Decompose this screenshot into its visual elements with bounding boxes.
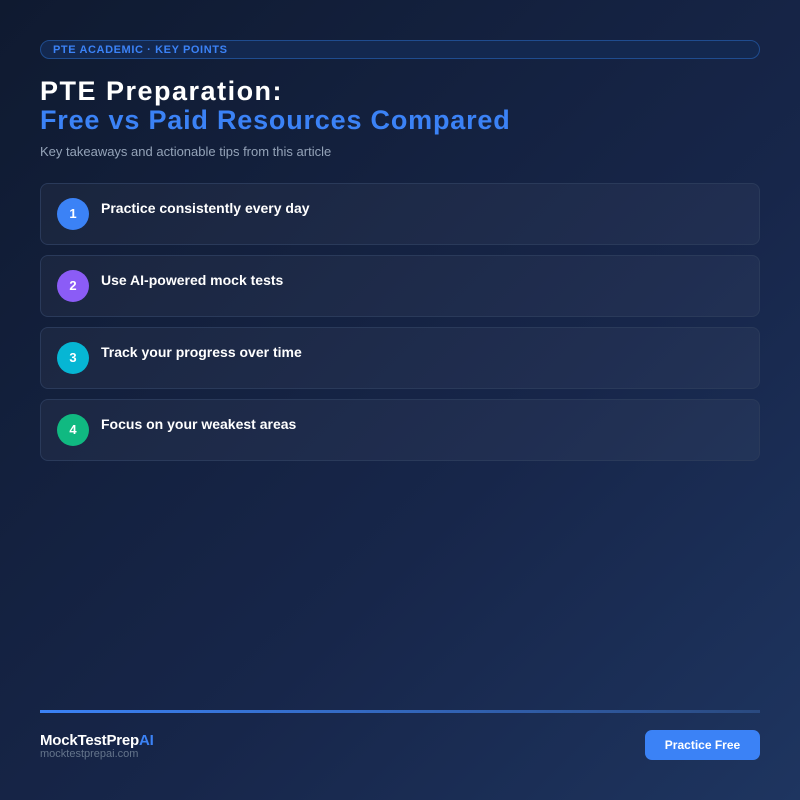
button: Practice Free (665, 738, 740, 752)
badge: PTE ACADEMIC · KEY POINTS (53, 44, 228, 56)
card 1: Practice consistently every day (101, 200, 310, 216)
button (645, 730, 760, 760)
card 2 (40, 255, 760, 317)
card 4 (40, 399, 760, 461)
subtitle: Key takeaways and actionable tips from this article (40, 144, 331, 159)
url: mocktestprepai.com (40, 748, 138, 760)
card 1: 1 (69, 206, 77, 221)
title line 2: Free vs Paid Resources Compared (40, 105, 510, 135)
card 1 (40, 183, 760, 245)
card 3 (40, 327, 760, 389)
card 4: Focus on your weakest areas (101, 416, 296, 432)
card 4: 4 (69, 422, 77, 437)
badge (40, 40, 760, 59)
card 2: Use AI-powered mock tests (101, 272, 283, 288)
card 2: 2 (69, 278, 77, 293)
brand: MockTestPrepAI (40, 732, 154, 749)
card 3: 3 (69, 350, 77, 365)
title line 1: PTE Preparation: (40, 76, 283, 106)
card 3: Track your progress over time (101, 344, 302, 360)
